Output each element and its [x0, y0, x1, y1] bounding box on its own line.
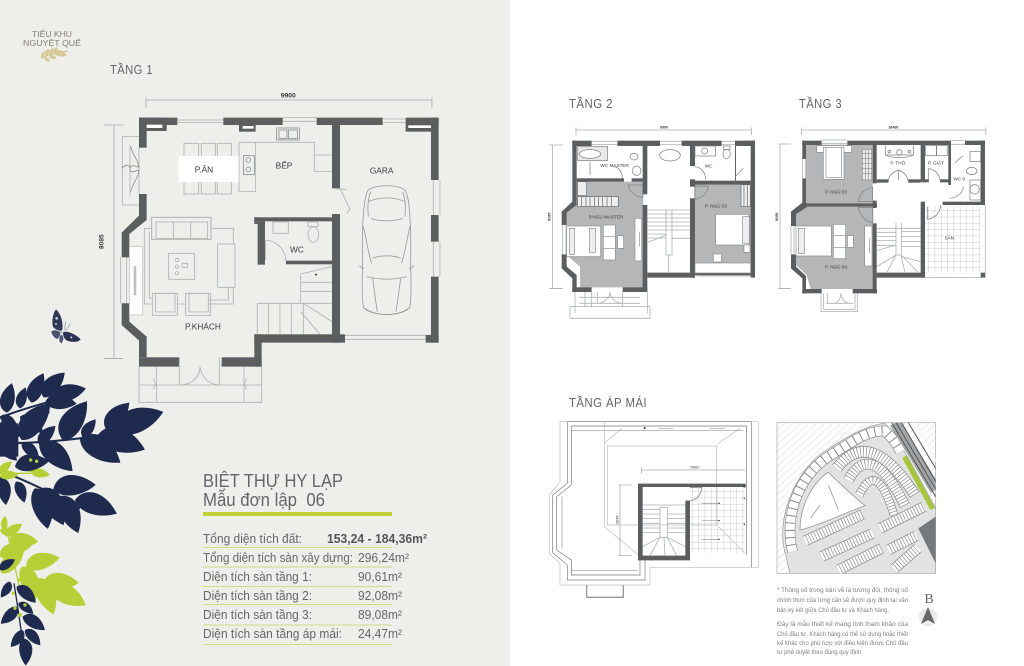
windows [563, 141, 751, 276]
row: roof floor: 24,47m² [358, 626, 403, 641]
staircase [877, 223, 921, 273]
row: floor 3: 89,08m² [358, 607, 403, 622]
labels: WC [705, 164, 713, 169]
dormer bay [587, 585, 623, 597]
navy leaves [0, 366, 167, 537]
heading: Tầng áp mái: TẦNG ÁP MÁI [569, 395, 647, 410]
label: P.Khách: P.KHÁCH [185, 321, 221, 331]
lime leaves over navy [0, 458, 91, 618]
dimensions: 16480 [888, 125, 898, 129]
highway [895, 423, 936, 490]
staircase [257, 267, 332, 334]
accent bar [203, 512, 392, 516]
row: floor 1: 90,61m² [358, 569, 403, 584]
altar and laundry fittings [886, 146, 947, 182]
central park [800, 472, 865, 530]
dimension: 5900: 5900 [691, 464, 700, 469]
walls [791, 141, 985, 293]
labels: SÂN [945, 235, 954, 241]
dimension: 8085: 8085 [98, 234, 105, 249]
note text [777, 587, 909, 656]
hatching [777, 423, 936, 573]
note paragraph 2: Chủ đầu tư. Khách hàng có thể sử dụng hoặc thiết [777, 631, 908, 638]
bed: P.Ngủ 03 [817, 146, 872, 180]
north arrow [919, 592, 937, 626]
labels: P. THỜ [890, 159, 906, 165]
labels: P. NGỦ 04 [825, 264, 847, 270]
terrace tiles [925, 207, 981, 273]
sink and stove [244, 128, 299, 175]
roof outer outlines [549, 422, 758, 585]
row: total floor area: 296,24m² [358, 550, 410, 565]
labels: P.NGỦ MASTER [589, 214, 624, 220]
note paragraph 2: kế khác cho phù hợp với điều kiện được Chủ đầu [777, 640, 909, 647]
door swings [858, 187, 941, 223]
stair marker [315, 274, 317, 276]
attic walls [638, 484, 746, 560]
labels: P. NGỦ 02 [705, 202, 727, 208]
terrace tile area [690, 487, 745, 553]
kitchen counter [239, 142, 332, 192]
subtitle: Mẫu đơn lập 06: Mẫu đơn lập 06 [203, 489, 325, 510]
entrance steps [139, 367, 262, 402]
terrace door [690, 487, 702, 501]
butterfly [51, 309, 81, 343]
windows and doors [121, 118, 440, 385]
curved lots row 1 [837, 452, 915, 495]
walls [562, 141, 755, 292]
row: floor 3: Diện tích sàn tầng 3: [203, 607, 312, 622]
drain markers [644, 427, 745, 540]
labels: WC 0 [953, 177, 966, 182]
note paragraph 1: bản ký kết giữa Chủ đầu tư và Khách hàng. [777, 607, 889, 614]
note paragraph 1 [777, 587, 909, 614]
floor plan: Tầng 2 [548, 125, 755, 318]
heading: Tầng 3: TẦNG 3 [799, 96, 842, 111]
labels: P. GIẶT [928, 159, 944, 165]
foliage decoration [0, 366, 167, 666]
dimensions: 8085 [548, 213, 552, 221]
row separators [203, 548, 392, 644]
row: floor 2 [203, 588, 403, 603]
lime berries [12, 458, 38, 617]
note paragraph 1: * Thông số trong bản vẽ là tương đối, thông số [777, 587, 909, 594]
curved lots row 3 [859, 481, 894, 515]
labels [589, 163, 727, 220]
heading: Tầng 1: TẦNG 1 [110, 62, 153, 77]
dimensions [775, 125, 986, 288]
curved lots row 2 [848, 464, 905, 506]
TV console [129, 247, 143, 315]
note paragraph 2: tư phê duyệt theo đúng quy định. [777, 649, 863, 656]
note paragraph 2 [777, 621, 909, 656]
dimension: 9900: 9900 [281, 93, 296, 100]
logo: Tiểu khu Nguyệt Quế: TIỂU KHU [32, 28, 72, 39]
master bed and sofa [567, 218, 642, 261]
row: floor 1 [203, 569, 403, 584]
labels: WC MASTER [600, 163, 630, 168]
labels: P. NGỦ 03 [825, 188, 847, 194]
north arrow: B [924, 592, 934, 607]
roof eaves [553, 422, 751, 580]
balcony [821, 293, 857, 312]
labels [825, 159, 966, 270]
title: Biệt thự Hy Lạp: BIỆT THỰ HY LẠP [203, 471, 343, 491]
label: Bếp: BẾP [276, 161, 293, 171]
row: land area: Tổng diện tích đất: [203, 531, 302, 546]
heading: Tầng 2: TẦNG 2 [569, 96, 613, 111]
dimensions: 9900 [660, 125, 668, 129]
staircase [647, 209, 690, 273]
dimension: 3045: 3045 [614, 515, 619, 524]
balcony [570, 292, 650, 318]
row: floor 3 [203, 607, 403, 622]
car in garage [359, 186, 414, 315]
bed and sofa: P.Ngủ 04 [796, 224, 872, 266]
floor plan: Tầng 3 [775, 125, 986, 312]
navy lower sprig [0, 455, 49, 666]
grey bedroom floors [796, 145, 873, 289]
side door swings [122, 147, 139, 192]
row: land area [203, 531, 428, 546]
corner building [918, 517, 936, 563]
door swings [628, 185, 708, 199]
wall niches [147, 125, 431, 129]
row: floor 2: Diện tích sàn tầng 2: [203, 588, 312, 603]
park dividers [811, 485, 838, 518]
windows and edges [791, 140, 985, 278]
row: total floor area: Tổng diện tích sàn xây dựng: [203, 550, 353, 565]
left page background [0, 0, 510, 666]
row: land area: 153,24 - 184,36m² [327, 531, 428, 546]
label: P.Ăn: P.ĂN [195, 165, 213, 175]
label: Gara: GARA [370, 165, 394, 175]
straight lots rows [805, 507, 924, 570]
perimeter lots [790, 431, 901, 552]
row: floor 2: 92,08m² [358, 588, 403, 603]
wardrobes [578, 182, 750, 207]
inner parapet [562, 431, 743, 571]
dimensions [548, 125, 751, 288]
floor plan: Tầng 1 [98, 93, 440, 402]
dimension lines [104, 97, 432, 359]
note paragraph 2: Đây là mẫu thiết kế mang tính tham khảo của [777, 621, 909, 628]
floor plan: Tầng áp mái [549, 422, 758, 597]
dimension lines [618, 467, 745, 556]
roof markers [658, 429, 725, 539]
walls [122, 118, 439, 367]
dimensions: 8085 [775, 213, 779, 221]
row: roof floor: Diện tích sàn tầng áp mái: [203, 626, 342, 641]
highlighted plot [904, 457, 933, 509]
living room furniture [144, 217, 235, 315]
label: WC: WC [290, 244, 304, 254]
dining table: P.Ăn [179, 143, 239, 194]
grey bedroom floors [567, 182, 751, 287]
row: floor 1: Diện tích sàn tầng 1: [203, 569, 312, 584]
staircase [643, 505, 685, 556]
WC 3 fixtures [950, 152, 981, 200]
area specification table [203, 531, 428, 644]
note paragraph 1: chính thức của từng căn sẽ được quy định tại văn [777, 597, 909, 604]
bed: P.Ngủ 02 [695, 214, 751, 273]
logo: Tiểu khu Nguyệt Quế [23, 28, 81, 63]
site map [777, 423, 936, 573]
bathroom fixtures [578, 146, 743, 179]
WC fixtures [266, 222, 319, 261]
logo: Tiểu khu Nguyệt Quế: NGUYỆT QUẾ [23, 38, 81, 48]
block outlines [783, 423, 936, 573]
